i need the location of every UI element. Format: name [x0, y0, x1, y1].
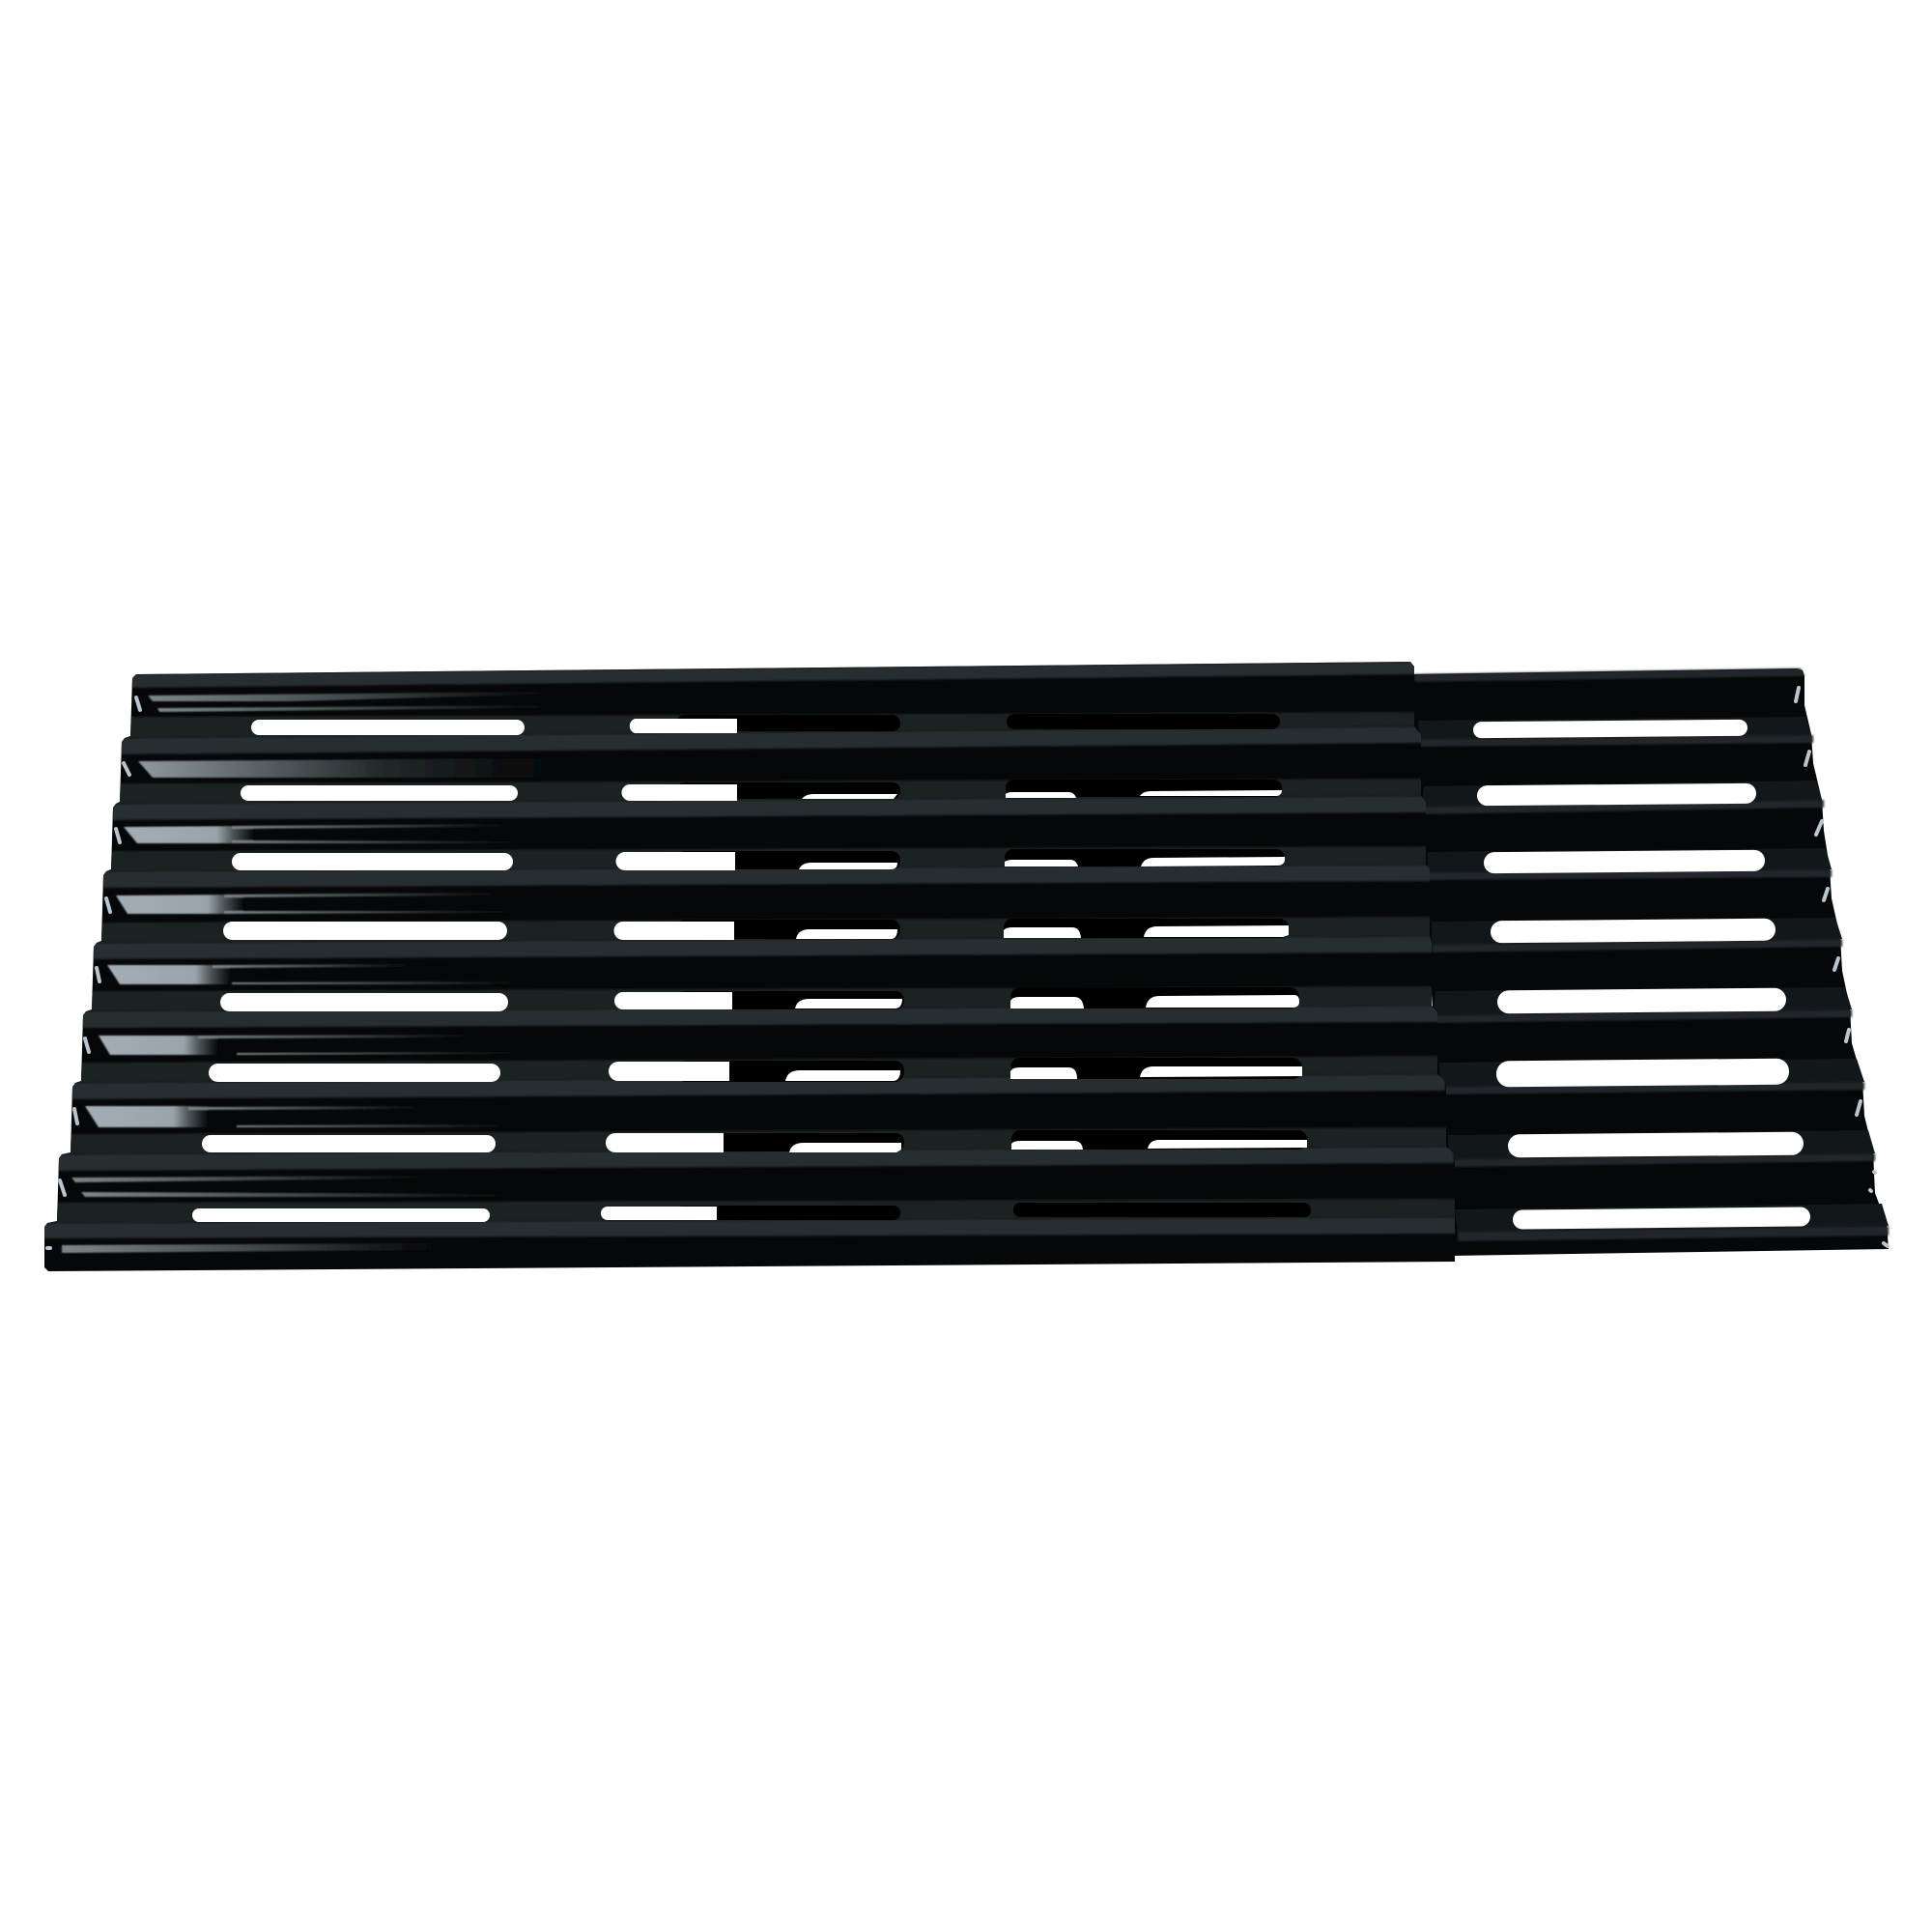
right section slots [1473, 720, 1810, 1230]
long left slots [192, 720, 525, 1222]
left section rails [39, 662, 1461, 1238]
right section metallic glints [1796, 688, 1888, 1246]
left end metallic glints [47, 697, 140, 1248]
glossy highlights [62, 692, 541, 1253]
right grate section [1410, 668, 1889, 1256]
centre-right dark slots [1004, 714, 1311, 1217]
partially covered slots, centre [785, 794, 902, 1152]
left section flanges [40, 712, 1457, 1223]
product photo: black expandable grill grate [44, 662, 1890, 1271]
half-open white slots [601, 719, 737, 1220]
centre-left dark slots [676, 715, 904, 1220]
left grate section [39, 657, 1463, 1275]
right section rails [1414, 668, 1889, 1241]
partially covered slots, centre-right [1004, 790, 1307, 1150]
